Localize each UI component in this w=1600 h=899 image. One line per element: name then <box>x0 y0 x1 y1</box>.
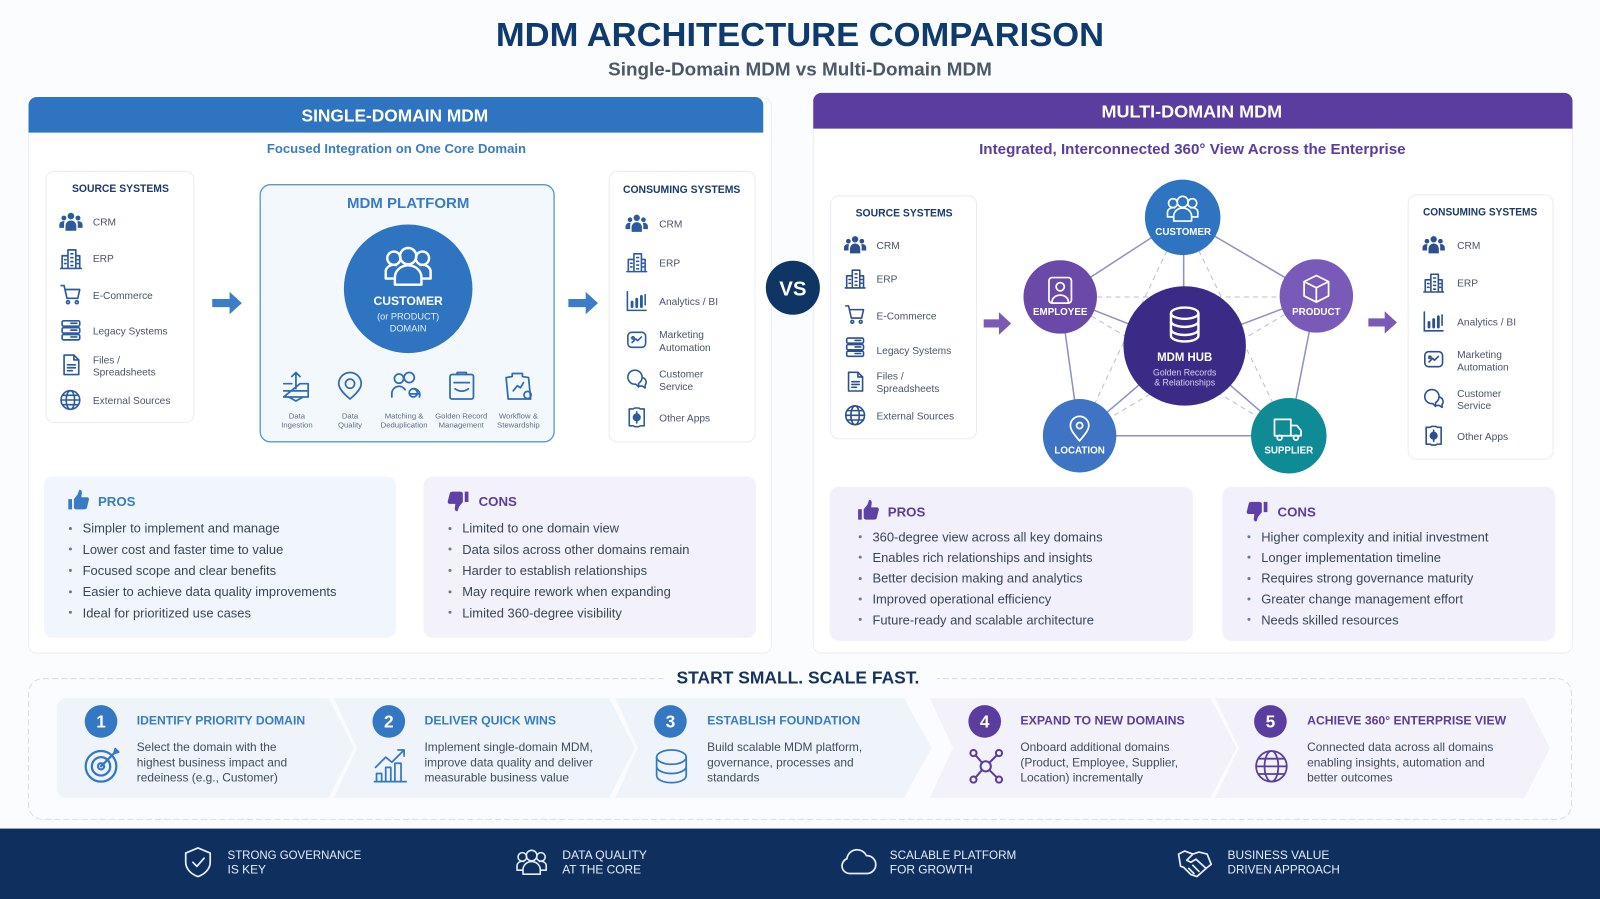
consumer: Other Apps <box>629 408 710 427</box>
footer: business value <box>1179 848 1340 877</box>
step 5: better outcomes <box>1307 771 1393 785</box>
cons: single-domain: Data silos across other domains remain <box>462 542 689 557</box>
node: employee: EMPLOYEE <box>1033 307 1088 318</box>
step 3: standards <box>707 771 760 785</box>
capability: Data Ingestion <box>281 372 313 430</box>
consumer: ERP: ERP <box>1457 279 1478 290</box>
capability: Matching & Deduplication: Deduplication <box>381 421 428 430</box>
source: CRM: CRM <box>877 241 900 252</box>
capability: Data Ingestion: Ingestion <box>281 421 313 430</box>
step 5: Connected data across all domains <box>1307 740 1493 754</box>
capability: Workflow & Stewardship: Workflow & <box>499 411 539 420</box>
source: Files / Spreadsheets: Files / <box>877 372 904 383</box>
cons: multi-domain: Longer implementation timeline <box>1261 550 1441 565</box>
capability: Data Quality <box>338 372 362 430</box>
step 3: 3 <box>666 712 676 732</box>
capability: Matching & Deduplication <box>381 372 428 430</box>
pros: multi-domain: Better decision making and analytics <box>872 571 1082 586</box>
step 3: governance, processes and <box>707 755 854 769</box>
node: MDM hub: MDM HUB <box>1157 351 1212 364</box>
cons: multi-domain: CONS <box>1278 504 1316 519</box>
node: supplier <box>1251 398 1327 473</box>
cons: single-domain: May require rework when expanding <box>462 584 671 599</box>
source: Files / Spreadsheets: Files / <box>93 355 120 366</box>
source: ERP: ERP <box>93 254 114 265</box>
consumer: Marketing Automation: Marketing <box>659 330 704 341</box>
step 2: DELIVER QUICK WINS <box>424 714 556 728</box>
step 2: Implement single-domain MDM, <box>424 740 593 754</box>
step 4: Onboard additional domains <box>1020 740 1170 754</box>
capability: Data Quality: Quality <box>338 421 362 430</box>
panel: single-domain MDM <box>29 97 771 653</box>
pros: multi-domain: Enables rich relationships and insights <box>872 550 1093 565</box>
node: product <box>1280 259 1353 333</box>
cons: single-domain: Harder to establish relationships <box>462 563 647 578</box>
pros: single-domain: Easier to achieve data quality improvements <box>83 584 337 599</box>
consumer: Customer Service: Customer <box>1457 389 1502 400</box>
consumer: CRM <box>1422 236 1480 253</box>
cons: multi-domain: Greater change management effort <box>1261 592 1463 607</box>
step 3 <box>615 698 932 798</box>
footer: scalable platform <box>842 848 1016 876</box>
consumer: Customer Service: Service <box>659 382 693 393</box>
footer: scalable platform: FOR GROWTH <box>890 862 973 876</box>
pros: multi-domain: Future-ready and scalable architecture <box>872 613 1094 628</box>
pros: single-domain: Focused scope and clear benefits <box>83 563 276 578</box>
subheading: single-domain: Focused Integration on One Core Domain <box>267 141 526 156</box>
consumer: Customer Service: Service <box>1457 401 1491 412</box>
source: Files / Spreadsheets: Spreadsheets <box>877 384 939 395</box>
source: Legacy Systems: Legacy Systems <box>877 346 951 357</box>
node: customer <box>1145 180 1220 255</box>
pros: multi-domain: PROS <box>888 504 925 519</box>
source: Legacy Systems: Legacy Systems <box>93 327 168 338</box>
step 1: IDENTIFY PRIORITY DOMAIN <box>137 714 305 728</box>
footer: strong governance: STRONG GOVERNANCE <box>228 848 361 862</box>
cons: multi-domain: Higher complexity and initial investment <box>1261 529 1489 544</box>
customer domain circle: CUSTOMER <box>373 295 443 308</box>
source: External Sources <box>61 391 170 409</box>
pros: single-domain: Simpler to implement and manage <box>83 521 280 536</box>
footer: data quality: AT THE CORE <box>562 862 641 876</box>
consumer: Customer Service <box>628 370 704 393</box>
step 4 <box>930 698 1237 798</box>
pros: single-domain: PROS <box>98 494 136 509</box>
step 5: enabling insights, automation and <box>1307 755 1485 769</box>
VS badge: VS <box>779 278 806 300</box>
consumer: Marketing Automation <box>1425 350 1509 373</box>
customer domain circle: (or PRODUCT) <box>377 311 439 321</box>
MDM platform box <box>260 185 554 442</box>
step 2: measurable business value <box>424 771 569 785</box>
consumer: CRM: CRM <box>659 220 682 231</box>
source systems box <box>831 196 977 439</box>
source systems box: SOURCE SYSTEMS <box>856 207 953 219</box>
header: multi-domain <box>813 93 1572 129</box>
roadmap: start small, scale fast <box>29 668 1571 819</box>
step 5: 5 <box>1266 712 1276 732</box>
node: location <box>1043 399 1116 472</box>
step 3: Build scalable MDM platform, <box>707 740 862 754</box>
source: ERP <box>845 270 898 288</box>
source: Legacy Systems <box>847 338 951 357</box>
capability: Workflow & Stewardship: Stewardship <box>497 421 540 430</box>
cons: multi-domain <box>1222 487 1555 641</box>
capability: Workflow & Stewardship <box>497 373 540 430</box>
customer domain circle <box>344 224 472 353</box>
node: employee <box>1023 260 1097 334</box>
pros: multi-domain <box>830 487 1193 641</box>
consumer: Customer Service: Customer <box>659 370 704 381</box>
source: Files / Spreadsheets <box>64 355 156 379</box>
consumer: Marketing Automation <box>628 330 711 354</box>
title: MDM ARCHITECTURE COMPARISON <box>496 17 1104 54</box>
node: MDM hub: & Relationships <box>1154 378 1216 388</box>
step 1: 1 <box>96 712 106 732</box>
source: E-Commerce: E-Commerce <box>877 311 937 322</box>
capability: Golden Record Management: Management <box>439 421 485 430</box>
consumer: Analytics / BI: Analytics / BI <box>1457 318 1516 329</box>
source: External Sources: External Sources <box>93 396 170 407</box>
footer: data quality <box>517 848 647 876</box>
node: location: LOCATION <box>1054 446 1105 457</box>
step 1: highest business impact and <box>137 755 287 769</box>
source: Files / Spreadsheets <box>849 372 939 395</box>
panel: multi-domain MDM <box>813 93 1572 653</box>
capability: Matching & Deduplication: Matching & <box>385 411 424 420</box>
capability: Golden Record Management: Golden Record <box>435 411 487 420</box>
consumer: Other Apps <box>1426 426 1508 445</box>
step 1: Select the domain with the <box>137 740 277 754</box>
cons: single-domain: Limited to one domain view <box>462 521 620 536</box>
cons: single-domain: CONS <box>479 494 517 509</box>
source: ERP <box>61 250 114 268</box>
step 4: Location) incrementally <box>1020 771 1143 785</box>
consumer: CRM <box>626 215 682 232</box>
step 3: ESTABLISH FOUNDATION <box>707 714 860 728</box>
step 2: 2 <box>384 712 394 732</box>
step 2 <box>334 698 635 798</box>
footer: business value: BUSINESS VALUE <box>1228 848 1329 862</box>
cons: single-domain: Limited 360-degree visibility <box>462 605 622 620</box>
step 4: (Product, Employee, Supplier, <box>1020 755 1178 769</box>
consumer: Analytics / BI <box>627 292 718 310</box>
source: E-Commerce: E-Commerce <box>93 291 153 302</box>
cons: multi-domain: Requires strong governance maturity <box>1261 571 1474 586</box>
source: E-Commerce <box>61 286 153 304</box>
source: Files / Spreadsheets: Spreadsheets <box>93 368 156 379</box>
consuming systems box <box>1408 195 1553 459</box>
footer: strong governance <box>186 848 361 877</box>
VS badge <box>766 261 820 315</box>
cons: single-domain <box>423 477 756 638</box>
cons: multi-domain: Needs skilled resources <box>1261 613 1399 628</box>
consumer: CRM: CRM <box>1457 241 1480 252</box>
consumer: ERP <box>1424 274 1478 292</box>
pros: single-domain: Ideal for prioritized use cases <box>83 605 251 620</box>
capability: Data Ingestion: Data <box>289 411 306 420</box>
consumer: ERP <box>627 254 680 272</box>
source systems box: SOURCE SYSTEMS <box>72 183 169 195</box>
source: ERP: ERP <box>877 275 898 286</box>
consumer: Customer Service <box>1425 389 1502 412</box>
step 1: redeiness (e.g., Customer) <box>137 771 278 785</box>
source: CRM: CRM <box>93 218 116 229</box>
step 5: ACHIEVE 360° ENTERPRISE VIEW <box>1307 714 1507 728</box>
pros: single-domain: Lower cost and faster time to value <box>83 542 283 557</box>
source: CRM <box>59 213 116 231</box>
footer bar <box>0 829 1600 899</box>
footer: scalable platform: SCALABLE PLATFORM <box>890 848 1016 862</box>
arrow: hub to consumers <box>1368 311 1397 334</box>
network connectors <box>1060 217 1316 436</box>
source systems box <box>46 171 194 422</box>
footer: strong governance: IS KEY <box>228 862 266 876</box>
capability: Golden Record Management <box>435 372 487 430</box>
roadmap heading: START SMALL. SCALE FAST. <box>677 668 919 688</box>
header: multi-domain: MULTI-DOMAIN MDM <box>1102 101 1282 121</box>
arrow: platform to consumers <box>568 292 598 314</box>
source: CRM <box>844 236 900 253</box>
arrow: source to platform <box>212 292 242 314</box>
footer: business value: DRIVEN APPROACH <box>1228 862 1340 876</box>
step 2: improve data quality and deliver <box>424 755 593 769</box>
node: customer: CUSTOMER <box>1155 227 1211 238</box>
pros: multi-domain: 360-degree view across all key domains <box>872 529 1103 544</box>
header: single-domain <box>29 97 763 133</box>
node: MDM hub <box>1123 286 1246 406</box>
step 4: 4 <box>980 712 990 732</box>
footer: data quality: DATA QUALITY <box>562 848 647 862</box>
source: External Sources: External Sources <box>877 411 954 422</box>
step 4: EXPAND TO NEW DOMAINS <box>1020 714 1185 728</box>
consumer: Analytics / BI: Analytics / BI <box>659 297 718 308</box>
node: supplier: SUPPLIER <box>1264 446 1313 457</box>
capability: Data Quality: Data <box>342 411 359 420</box>
pros: multi-domain: Improved operational efficiency <box>872 592 1052 607</box>
node: product: PRODUCT <box>1292 307 1341 318</box>
consumer: Analytics / BI <box>1424 312 1516 331</box>
source: Legacy Systems <box>62 321 168 340</box>
consuming systems box <box>609 171 755 442</box>
consumer: Marketing Automation: Automation <box>659 343 711 354</box>
arrow: sources to hub <box>984 312 1011 335</box>
consumer: ERP: ERP <box>659 258 680 269</box>
customer domain circle: DOMAIN <box>390 324 427 334</box>
source: E-Commerce <box>846 306 937 323</box>
subtitle: Single-Domain MDM vs Multi-Domain MDM <box>608 59 992 80</box>
consumer: Other Apps: Other Apps <box>659 413 710 424</box>
step 1 <box>57 698 354 798</box>
consuming systems box: CONSUMING SYSTEMS <box>1423 206 1537 218</box>
MDM platform box: MDM PLATFORM <box>347 196 469 212</box>
header: single-domain: SINGLE-DOMAIN MDM <box>302 105 488 125</box>
step 5 <box>1215 698 1550 798</box>
node: MDM hub: Golden Records <box>1153 368 1217 378</box>
pros: single-domain <box>44 477 396 638</box>
consumer: Marketing Automation: Automation <box>1457 362 1509 373</box>
consumer: Other Apps: Other Apps <box>1457 432 1508 443</box>
subheading: multi-domain: Integrated, Interconnected 360° View Across the Enterprise <box>979 142 1406 158</box>
consumer: Marketing Automation: Marketing <box>1457 350 1502 361</box>
domain network <box>1023 180 1353 473</box>
consuming systems box: CONSUMING SYSTEMS <box>623 184 740 196</box>
source: External Sources <box>846 406 954 425</box>
